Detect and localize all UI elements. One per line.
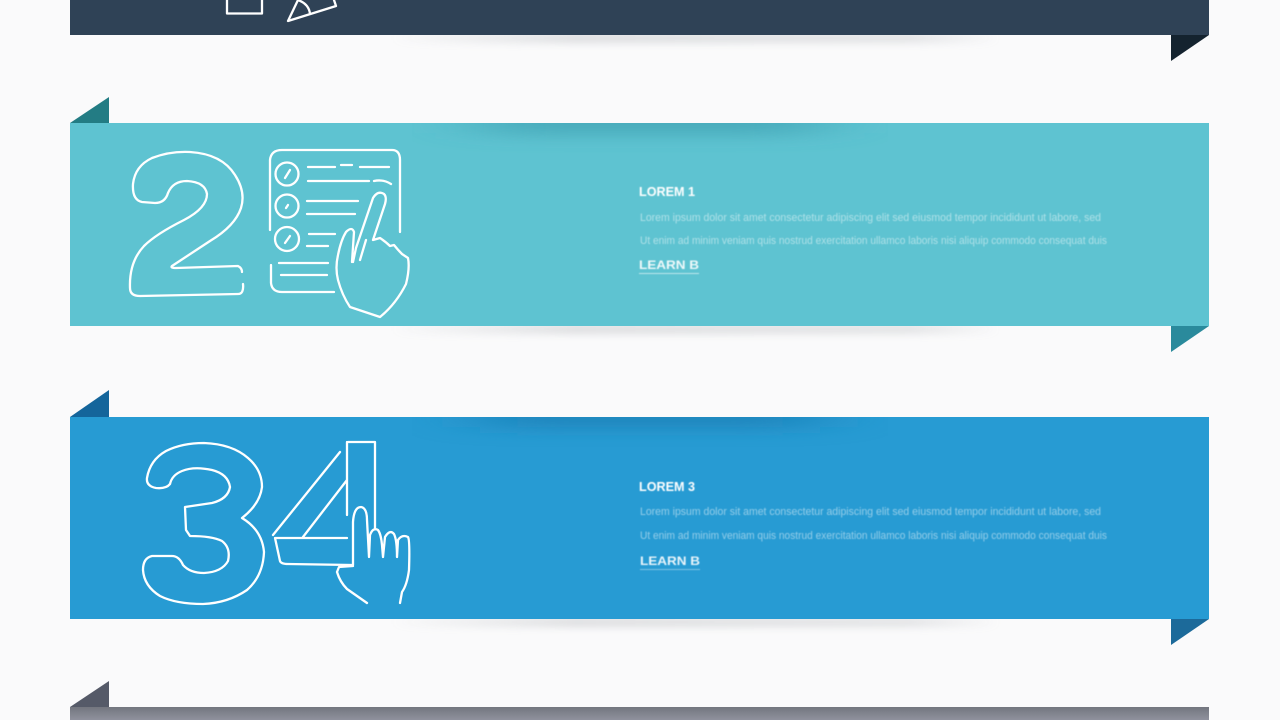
ribbon 2 link: LEARN B — [639, 258, 699, 272]
ribbon 3 upper fold — [70, 390, 109, 417]
ribbon 2 band — [70, 123, 1209, 326]
ribbon 3 top shade — [470, 417, 830, 432]
checklist lines — [279, 165, 391, 275]
text block: ribbon 3 — [639, 479, 1107, 570]
ribbon 2 body line 2: Ut enim ad minim veniam quis nostrud exercitation ullamco laboris nisi aliquip commodo consequat duis — [640, 235, 1107, 247]
text block: ribbon 2 — [639, 184, 1107, 274]
icon: checklist with pointing hand — [270, 150, 409, 317]
checklist bullet 1 — [276, 162, 298, 186]
checklist frame — [270, 150, 400, 292]
numeral 3 outline — [143, 443, 264, 604]
ribbon 1 drop shadow — [390, 33, 1000, 43]
panel: ribbon 1 (dark, cropped at top) — [70, 0, 1209, 61]
ribbon 3 drop shadow — [390, 617, 1000, 627]
ribbon 3 body line 1: Lorem ipsum dolor sit amet consectetur adipiscing elit sed eiusmod tempor incididunt ut labore, sed — [640, 506, 1101, 518]
ribbon 3 body line 2: Ut enim ad minim veniam quis nostrud exercitation ullamco laboris nisi aliquip commodo consequat duis — [640, 530, 1107, 542]
pointing hand — [336, 193, 409, 317]
numeral 4 outline — [273, 442, 375, 565]
icon: cropped square and triangle — [227, 0, 336, 21]
checklist bullet 2 — [276, 194, 298, 218]
ribbon 1 fold tail — [1171, 35, 1209, 61]
ribbon 4 band — [70, 707, 1209, 720]
panel: ribbon 4 (grey, cropped at bottom) — [70, 681, 1209, 720]
ribbon 2 drop shadow — [390, 324, 1000, 334]
ribbon 4 upper fold — [70, 681, 109, 707]
ribbon 2 fold tail — [1171, 326, 1209, 352]
ribbon 2 upper fold — [70, 97, 109, 123]
ribbon 2 top shade — [466, 123, 834, 138]
panel: ribbon 3 (blue) — [70, 390, 1209, 645]
ribbon 2 body line 1: Lorem ipsum dolor sit amet consectetur adipiscing elit sed eiusmod tempor incididunt ut labore, sed — [640, 212, 1101, 224]
ribbon 1 band — [70, 0, 1209, 35]
ribbon 3 link underline — [640, 569, 700, 570]
ribbon 3 band — [70, 417, 1209, 619]
ribbon 3 link: LEARN B — [640, 554, 700, 568]
ribbon 2 link underline — [639, 273, 699, 274]
shade glow — [470, 417, 830, 432]
shade glow — [466, 123, 834, 138]
ribbon 2 heading: LOREM 1 — [639, 184, 695, 199]
panel: ribbon 2 (teal) — [70, 97, 1209, 352]
check marks — [285, 170, 290, 243]
ribbon 3 heading: LOREM 3 — [639, 479, 695, 494]
ribbon 3 fold tail — [1171, 619, 1209, 645]
checklist bullet 3 — [275, 227, 299, 251]
numeral 2 outline — [130, 152, 243, 296]
icon: open hand — [337, 507, 409, 603]
